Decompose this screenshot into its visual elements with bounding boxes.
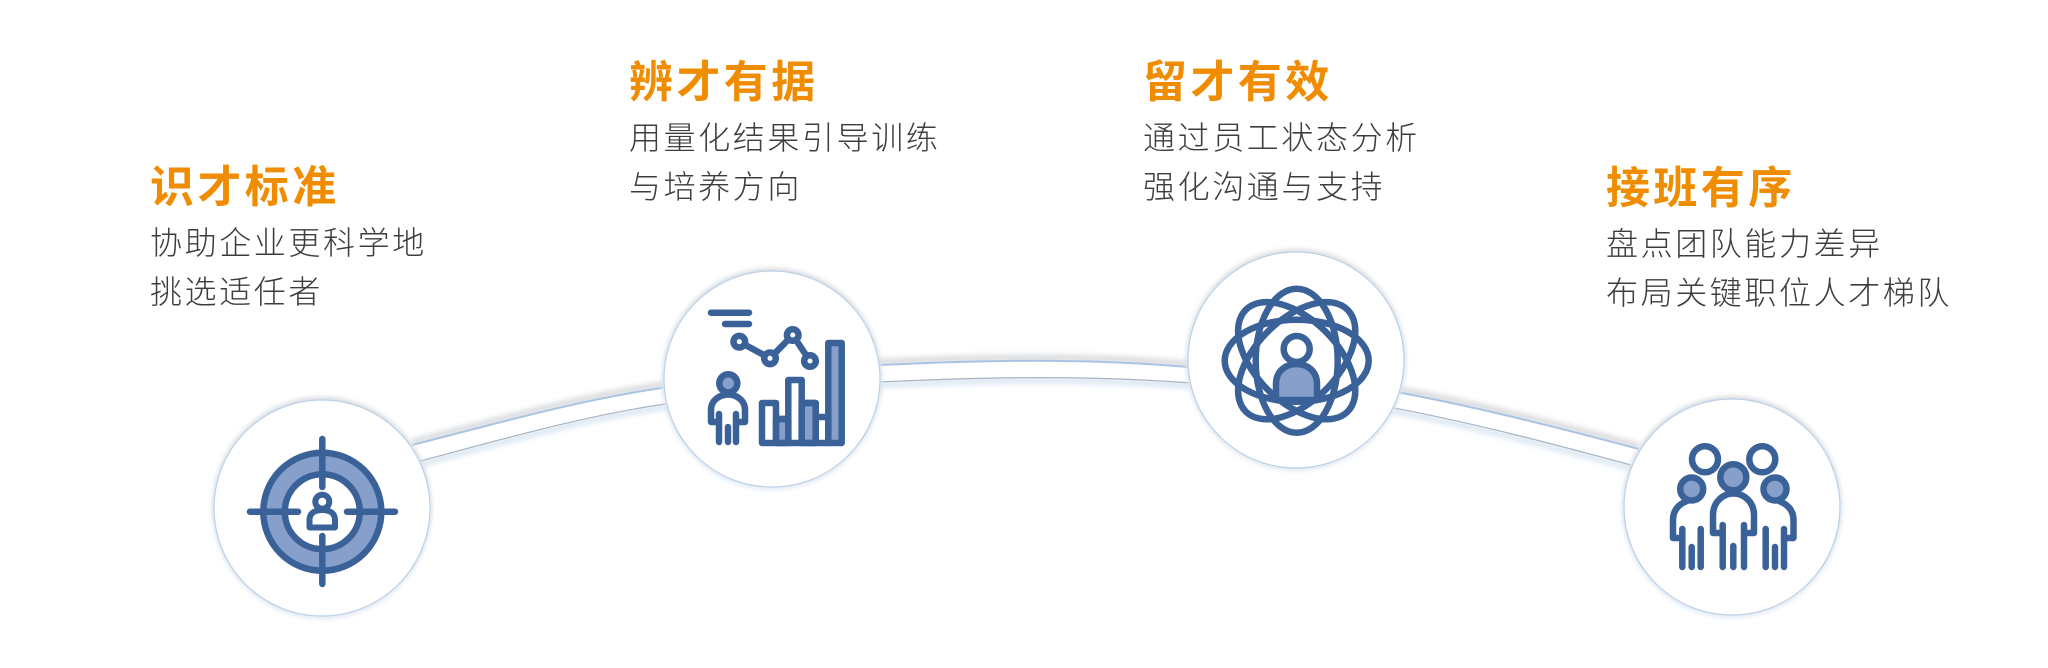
heading: 接班有序 xyxy=(1606,164,1796,213)
text block: 盘点团队能力差异 xyxy=(1606,226,1883,262)
heading: 辨才有据 xyxy=(629,58,819,107)
panel: 留才有效 xyxy=(1143,58,1420,205)
text block: 与培养方向 xyxy=(629,169,802,205)
circle: step 4 xyxy=(1623,396,1841,618)
icon: chart with person xyxy=(711,313,842,443)
panel: 接班有序 xyxy=(1606,164,1952,311)
icon: orbit with person xyxy=(1217,281,1377,441)
circle: step 3 xyxy=(1187,249,1405,471)
circle: step 2 xyxy=(663,268,881,490)
text block: 通过员工状态分析 xyxy=(1143,120,1420,156)
text block: 挑选适任者 xyxy=(150,274,323,310)
connector arc xyxy=(412,358,1639,468)
text block: 用量化结果引导训练 xyxy=(629,120,940,156)
panel: 识才标准 xyxy=(150,163,427,310)
heading: 留才有效 xyxy=(1143,58,1333,107)
text block: 协助企业更科学地 xyxy=(150,225,427,261)
text block: 强化沟通与支持 xyxy=(1143,169,1385,205)
icon: target with person xyxy=(250,439,395,584)
panel: 辨才有据 xyxy=(629,58,940,205)
text block: 布局关键职位人才梯队 xyxy=(1606,275,1952,311)
heading: 识才标准 xyxy=(150,163,340,212)
circle: step 1 xyxy=(213,397,431,619)
icon: team of people xyxy=(1673,446,1794,567)
